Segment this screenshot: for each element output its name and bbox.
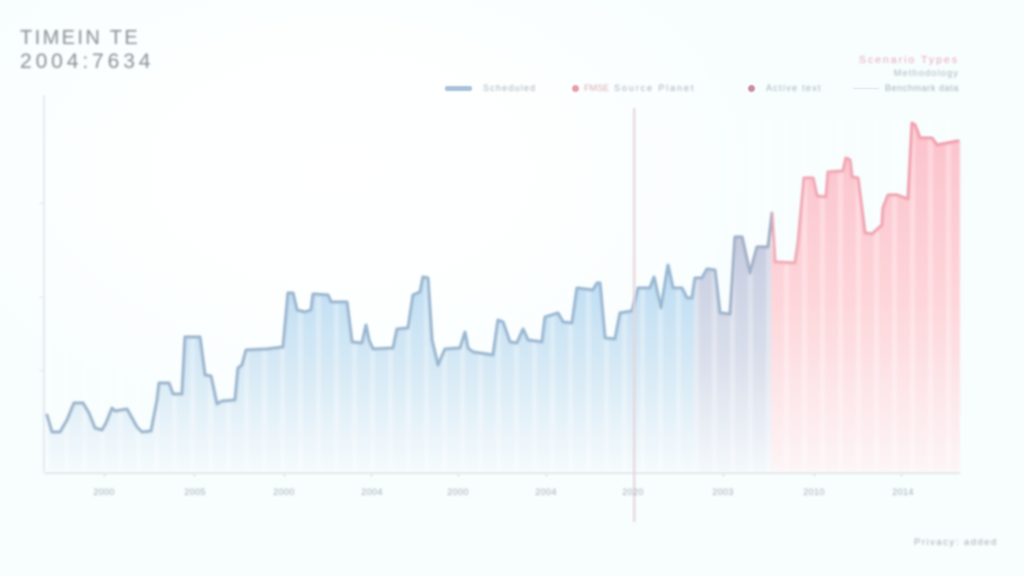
legend: forecast: Source Planet xyxy=(614,83,695,93)
legend: observed: Scheduled xyxy=(483,83,536,93)
x axis labels: 2004 xyxy=(535,487,557,497)
x axis labels: 2005 xyxy=(184,487,206,497)
legend: observed xyxy=(444,83,536,93)
top right heading: Scenario Types xyxy=(859,54,959,66)
title xyxy=(19,27,154,73)
y axis xyxy=(39,95,45,472)
x axis labels: 2020 xyxy=(622,487,644,497)
x axis labels: 2000 xyxy=(93,487,115,497)
data line xyxy=(47,123,958,432)
top right heading xyxy=(858,54,959,79)
x axis labels: 2003 xyxy=(712,487,734,497)
legend: forecast: FMSE xyxy=(584,83,609,93)
footer source note: Privacy: added xyxy=(914,537,998,548)
title: TIMEIN TE xyxy=(20,27,140,49)
legend: active: Active text xyxy=(766,83,822,93)
area fill: historical, transition and forecast segments xyxy=(46,120,960,472)
legend: reference: Benchmark data xyxy=(885,83,959,93)
title: 2004:7634 xyxy=(20,50,154,73)
x axis labels: 2000 xyxy=(447,487,469,497)
x axis labels: 2014 xyxy=(892,487,914,497)
legend: forecast xyxy=(571,83,695,93)
top right heading: Methodology xyxy=(894,68,959,79)
vertical marker line xyxy=(633,108,635,522)
x axis labels: 2004 xyxy=(361,487,383,497)
x axis labels xyxy=(93,487,914,497)
line chart: timeline series xyxy=(40,96,962,522)
x axis labels: 2010 xyxy=(803,487,825,497)
x axis labels: 2000 xyxy=(273,487,295,497)
x axis xyxy=(44,472,960,477)
